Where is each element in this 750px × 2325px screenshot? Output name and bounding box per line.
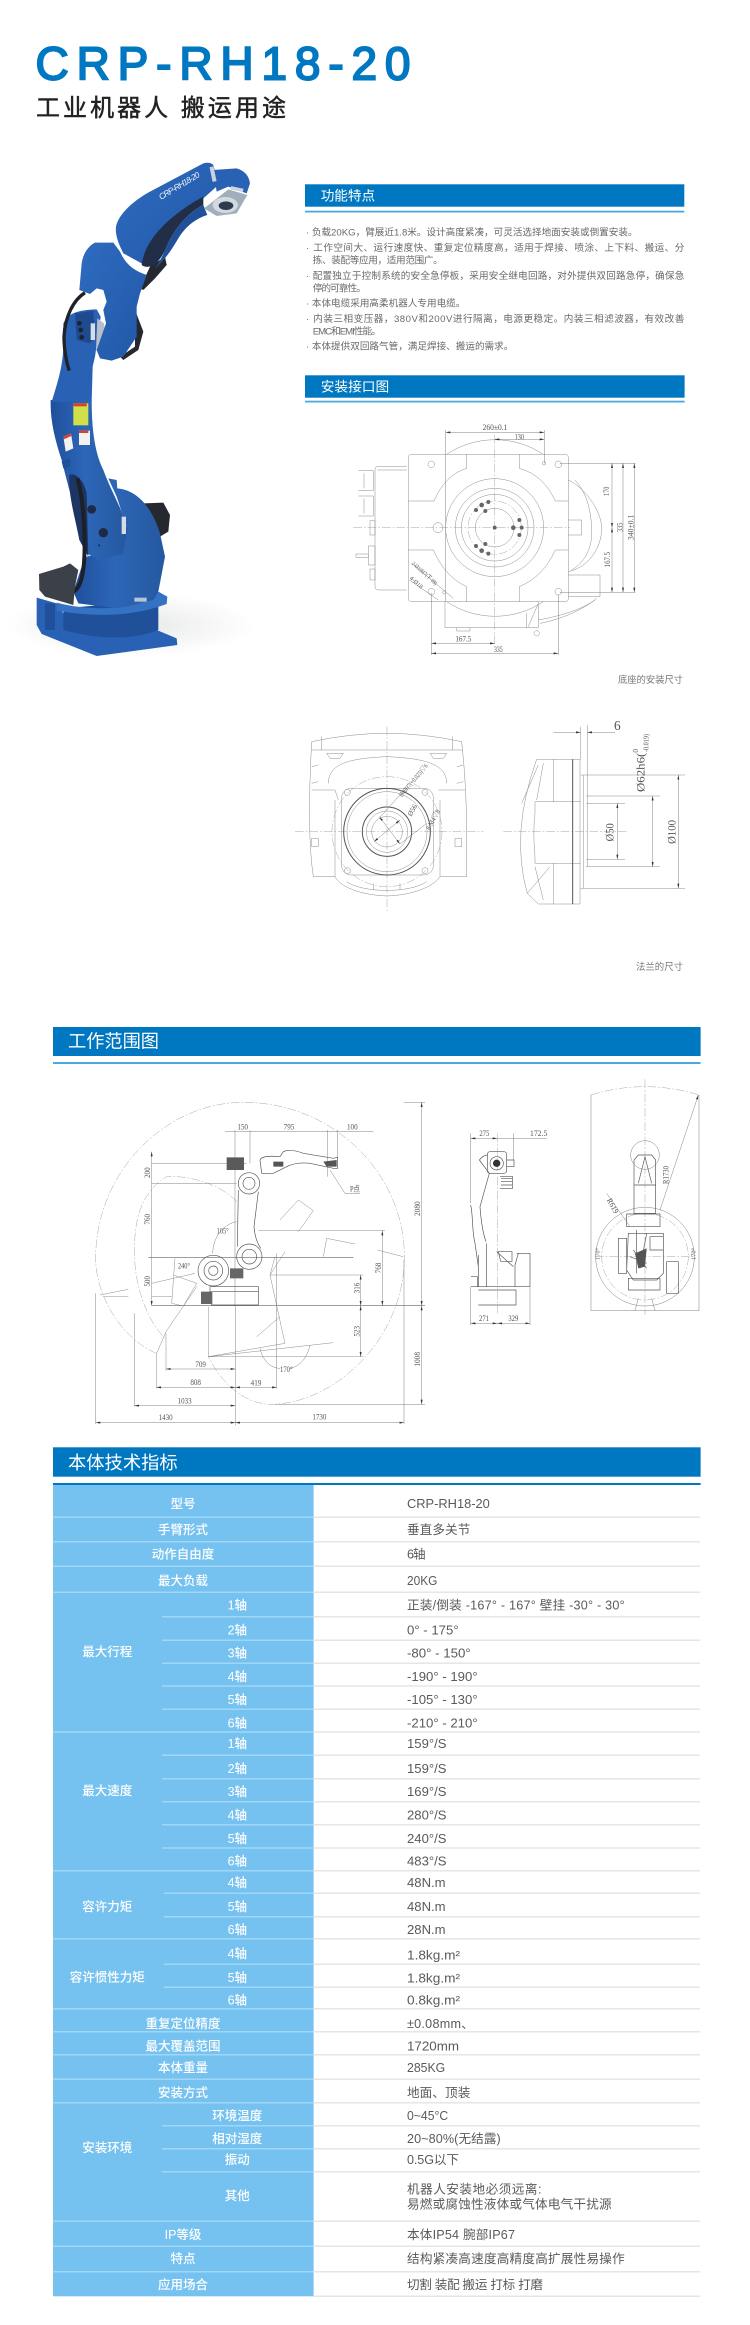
row: body weight: 285KG xyxy=(407,2061,445,2075)
group: max speed: 1轴 xyxy=(228,1736,247,1751)
top view working range drawing xyxy=(591,1079,699,1315)
group: max travel: -190° - 190° xyxy=(407,1670,478,1684)
flange side view drawing: Ø62h6( xyxy=(634,753,648,792)
flange front view drawing xyxy=(295,727,483,913)
side working range drawing: 200 xyxy=(143,1167,152,1178)
row: max coverage: 1720mm xyxy=(407,2040,459,2054)
group: max travel: 3轴 xyxy=(228,1646,247,1660)
feature 2 xyxy=(306,242,685,267)
safety labels xyxy=(73,403,88,425)
group: max travel: 0° - 175° xyxy=(407,1624,459,1638)
row: arm type: 垂直多关节 xyxy=(407,1523,470,1537)
side working range drawing: 240° xyxy=(178,1262,190,1271)
left label column xyxy=(53,1485,314,2296)
top view working range drawing: 170° xyxy=(691,1248,698,1260)
flange front view drawing: Ø40H7(+0.025)▽6 xyxy=(397,762,430,799)
base housing xyxy=(73,478,165,608)
side working range drawing: 419 xyxy=(251,1378,261,1387)
group: max travel xyxy=(82,1598,625,1730)
left column separators xyxy=(53,1517,314,2272)
section header: technical specifications xyxy=(53,1447,701,1485)
cable xyxy=(73,478,85,592)
flange front view drawing: 8-M4▽8 xyxy=(424,808,442,832)
group: installation environment: 机器人安装地必须远离: xyxy=(407,2182,542,2196)
side working range drawing: 808 xyxy=(190,1378,201,1387)
feature 6: · 本体提供双回路气管，满足焊接、搬运的需求。 xyxy=(306,340,513,352)
lower arm xyxy=(51,400,127,561)
feature 2: 拣、装配等应用，适用范围广。 xyxy=(313,255,443,267)
row: features: 结构紧凑高速度高精度高扩展性易操作 xyxy=(407,2251,625,2266)
side working range drawing: 105° xyxy=(217,1226,229,1235)
group: installation environment: 20~80%(无结露) xyxy=(407,2132,501,2146)
group: installation environment: 0.5G以下 xyxy=(407,2153,459,2167)
front elevation drawing: 275 xyxy=(479,1129,489,1138)
group: allowable inertia moment xyxy=(70,1946,460,2008)
row: model: 型号 xyxy=(170,1497,196,1511)
wrist xyxy=(213,168,250,193)
flange side view drawing: 6 xyxy=(614,718,621,733)
specifications table xyxy=(53,1485,700,2296)
feature 3: 配置独立于控制系统的安全急停板，采用安全继电回路，对外提供双回路急停，确保急 xyxy=(313,270,685,282)
section header: working range: 工作范围图 xyxy=(68,1032,159,1052)
side working range drawing: 1430 xyxy=(159,1413,173,1422)
side working range drawing: 768 xyxy=(374,1263,383,1273)
row: body weight xyxy=(158,2060,445,2075)
robot lower section xyxy=(37,400,177,656)
flange front view drawing: Ø56 xyxy=(405,803,419,818)
group: allowable inertia moment: 1.8kg.m² xyxy=(407,1972,460,1986)
feature 2: 工作空间大、运行速度快、重复定位精度高，适用于焊接、喷涂、上下料、搬运、分 xyxy=(313,242,685,254)
group: installation environment: 易燃或腐蚀性液体或气体电气干扰源 xyxy=(407,2196,612,2212)
group: allowable torque: 48N.m xyxy=(407,1900,446,1914)
section header: working range xyxy=(53,1027,701,1064)
row: applications xyxy=(158,2277,543,2292)
caption: base mounting size: 底座的安装尺寸 xyxy=(618,674,683,685)
group: max speed: 483°/S xyxy=(407,1854,446,1868)
group: max travel: 6轴 xyxy=(228,1716,247,1730)
group: allowable torque: 48N.m xyxy=(407,1876,446,1890)
group: installation environment xyxy=(82,2108,612,2212)
base flange ring xyxy=(57,592,167,615)
group: max speed: 2轴 xyxy=(228,1761,247,1776)
group: installation environment: 其他 xyxy=(225,2189,250,2203)
row: IP rating: 本体IP54 腕部IP67 xyxy=(407,2227,515,2242)
group: allowable inertia moment: 1.8kg.m² xyxy=(407,1948,460,1962)
feature 3: 停的可靠性。 xyxy=(313,283,366,295)
row: arm type xyxy=(158,1522,470,1537)
side working range drawing: 170° xyxy=(280,1365,293,1374)
side working range drawing: 2080 xyxy=(413,1201,422,1216)
row: max payload xyxy=(158,1573,437,1588)
group: max speed: 240°/S xyxy=(407,1832,446,1846)
row: degrees of freedom: 6轴 xyxy=(407,1548,426,1562)
front elevation drawing: 329 xyxy=(508,1314,518,1323)
group: max travel: -105° - 130° xyxy=(407,1693,478,1707)
row: repeat positioning accuracy: ±0.08mm、 xyxy=(407,2017,474,2031)
base plate xyxy=(37,598,177,656)
row: max coverage: 最大覆盖范围 xyxy=(145,2038,221,2054)
group: allowable inertia moment: 5轴 xyxy=(228,1970,247,1985)
flange xyxy=(204,189,247,216)
group: max speed: 最大速度 xyxy=(82,1783,133,1798)
feature 5: 内装三相变压器，380V和200V进行隔离，电源更稳定。内装三相滤波器，有效改善 xyxy=(313,313,685,325)
row: degrees of freedom xyxy=(152,1546,426,1562)
flange side view drawing: 0 xyxy=(631,749,640,753)
elbow motors xyxy=(120,310,143,360)
front elevation drawing xyxy=(471,1129,547,1325)
row: applications: 应用场合 xyxy=(158,2277,208,2292)
side working range drawing: 709 xyxy=(195,1360,206,1369)
group: allowable inertia moment: 4轴 xyxy=(228,1946,247,1961)
feature 2: · xyxy=(306,243,309,254)
row: mounting method: 地面、顶装 xyxy=(407,2086,471,2100)
base mounting drawing xyxy=(353,423,635,655)
feature 5 xyxy=(306,313,685,338)
row: degrees of freedom: 动作自由度 xyxy=(152,1546,215,1562)
flange side view drawing: -0.019) xyxy=(642,734,651,752)
group: max speed: 5轴 xyxy=(228,1831,247,1846)
base mounting drawing: 167.5 xyxy=(603,552,612,567)
group: allowable inertia moment: 容许惯性力矩 xyxy=(70,1970,145,1984)
feature 1: · 负载20KG，臂展近1.8米。设计高度紧凑，可灵活选择地面安装或倒置安装。 xyxy=(306,227,638,239)
group: max travel: 正装/倒装 -167° - 167° 壁挂 -30° - 30° xyxy=(407,1598,625,1612)
group: allowable torque: 4轴 xyxy=(228,1875,247,1890)
bolts and tags xyxy=(87,505,108,546)
elbow housing xyxy=(79,243,147,361)
arm cavity xyxy=(69,474,88,557)
feature 4: · 本体电缆采用高柔机器人专用电缆。 xyxy=(306,298,465,310)
side working range drawing: 760 xyxy=(143,1214,152,1225)
row: applications: 切割 装配 搬运 打标 打磨 xyxy=(407,2277,543,2292)
group: installation environment: 环境温度 xyxy=(212,2108,263,2123)
cable xyxy=(64,293,85,371)
base mounting drawing: 2-Ø10H7(下 08) xyxy=(410,560,438,587)
base mounting drawing: 260±0.1 xyxy=(483,423,507,432)
group: max travel: 2轴 xyxy=(228,1622,247,1638)
forearm cavity xyxy=(142,197,203,267)
side working range drawing: 100 xyxy=(347,1122,358,1131)
side working range drawing: 523 xyxy=(352,1326,361,1337)
top view working range drawing: R1730 xyxy=(661,1166,670,1184)
group: allowable torque: 5轴 xyxy=(228,1899,247,1914)
group: allowable torque: 28N.m xyxy=(407,1923,446,1937)
robot arm photo illustration xyxy=(5,163,255,657)
section header: installation interface xyxy=(305,375,685,402)
group: max speed: 4轴 xyxy=(228,1808,247,1822)
robot upper section xyxy=(52,163,250,402)
base mounting drawing: 340±0.1 xyxy=(626,515,635,540)
row: features: 特点 xyxy=(170,2251,196,2266)
row: IP rating xyxy=(165,2227,515,2242)
side working range drawing: 1008 xyxy=(413,1352,422,1367)
base mounting drawing: 167.5 xyxy=(455,634,471,643)
side working range drawing xyxy=(96,1102,425,1425)
flange side view drawing: Ø50 xyxy=(602,823,616,841)
feature list xyxy=(306,227,685,352)
row: mounting method: 安装方式 xyxy=(158,2085,208,2100)
feature 5: · xyxy=(306,314,309,325)
feature 5: EMC和EMI性能。 xyxy=(313,326,381,338)
row: repeat positioning accuracy: 重复定位精度 xyxy=(145,2016,221,2031)
row: IP rating: IP等级 xyxy=(165,2227,202,2242)
front elevation drawing: 271 xyxy=(479,1314,489,1323)
group: allowable inertia moment: 6轴 xyxy=(228,1992,247,2008)
group: installation environment: 0~45°C xyxy=(407,2109,448,2123)
row: mounting method xyxy=(158,2085,471,2100)
section header: features xyxy=(305,184,684,212)
connector box xyxy=(39,563,78,605)
base mounting drawing: 4-Ø18 xyxy=(408,576,423,590)
forearm xyxy=(116,163,218,266)
side working range drawing: 795 xyxy=(284,1122,294,1131)
group: max travel: -210° - 210° xyxy=(407,1716,478,1730)
robot model mark: CRP-RH18-20 xyxy=(157,169,202,202)
side working range drawing: 1033 xyxy=(178,1396,192,1405)
base mounting drawing: 130 xyxy=(515,432,524,441)
section header: technical specifications: 本体技术指标 xyxy=(68,1452,178,1473)
group: max travel: 最大行程 xyxy=(82,1645,133,1659)
group: max speed: 280°/S xyxy=(407,1808,446,1822)
group: max travel: 4轴 xyxy=(228,1669,247,1684)
group: allowable torque: 6轴 xyxy=(228,1922,247,1937)
group: max travel: 5轴 xyxy=(228,1692,247,1707)
row: body weight: 本体重量 xyxy=(158,2060,208,2075)
feature 3 xyxy=(306,270,685,295)
caption: flange size: 法兰的尺寸 xyxy=(636,961,683,972)
row: features xyxy=(170,2251,625,2266)
group: allowable inertia moment: 0.8kg.m² xyxy=(407,1994,460,2008)
row: model xyxy=(170,1497,490,1511)
row: repeat positioning accuracy xyxy=(145,2016,474,2031)
side working range drawing: P点 xyxy=(350,1184,360,1193)
feature 3: · xyxy=(306,271,309,282)
group: max speed: 169°/S xyxy=(407,1785,446,1799)
row: max payload: 20KG xyxy=(407,1574,437,1588)
row: max payload: 最大负载 xyxy=(158,1573,208,1588)
lower arm top xyxy=(52,309,101,402)
forearm lower strip xyxy=(155,205,207,268)
base mounting drawing: 335 xyxy=(494,645,503,654)
group: max speed xyxy=(82,1736,446,1868)
group: max speed: 159°/S xyxy=(407,1762,446,1776)
front elevation drawing: 172.5 xyxy=(530,1129,547,1138)
section header: features: 功能特点 xyxy=(321,188,375,203)
row: model: CRP-RH18-20 xyxy=(407,1497,490,1511)
row: max coverage xyxy=(145,2038,459,2054)
subtitle: 工业机器人 搬运用途 xyxy=(36,95,286,122)
group: max speed: 6轴 xyxy=(228,1854,247,1868)
group: max travel: -80° - 150° xyxy=(407,1646,471,1660)
section header: installation interface: 安装接口图 xyxy=(321,379,389,395)
group: installation environment: 相对湿度 xyxy=(212,2131,263,2146)
right column separators xyxy=(314,1517,700,2296)
flange side view drawing xyxy=(503,718,685,904)
title: CRP-RH18-20 xyxy=(36,38,410,90)
group: max speed: 159°/S xyxy=(407,1737,446,1751)
side working range drawing: 1730 xyxy=(312,1412,326,1421)
row: arm type: 手臂形式 xyxy=(158,1522,208,1537)
group: installation environment: 安装环境 xyxy=(82,2140,132,2155)
base mounting drawing: 335 xyxy=(615,523,624,532)
group: max travel: 1轴 xyxy=(228,1598,247,1612)
group: allowable torque xyxy=(82,1875,446,1937)
floor shadow xyxy=(5,593,255,657)
group: installation environment: 振动 xyxy=(225,2153,250,2167)
flange side view drawing: Ø100 xyxy=(664,820,678,844)
joint details xyxy=(75,311,95,343)
base mounting drawing: 170 xyxy=(602,487,611,496)
side working range drawing: 316 xyxy=(352,1283,361,1293)
side working range drawing: 150 xyxy=(237,1122,248,1131)
top view working range drawing: R619 xyxy=(605,1197,620,1215)
group: allowable torque: 容许力矩 xyxy=(82,1899,132,1914)
group: max speed: 3轴 xyxy=(228,1784,247,1799)
top view working range drawing: 170° xyxy=(595,1248,602,1260)
side working range drawing: 500 xyxy=(143,1276,152,1287)
